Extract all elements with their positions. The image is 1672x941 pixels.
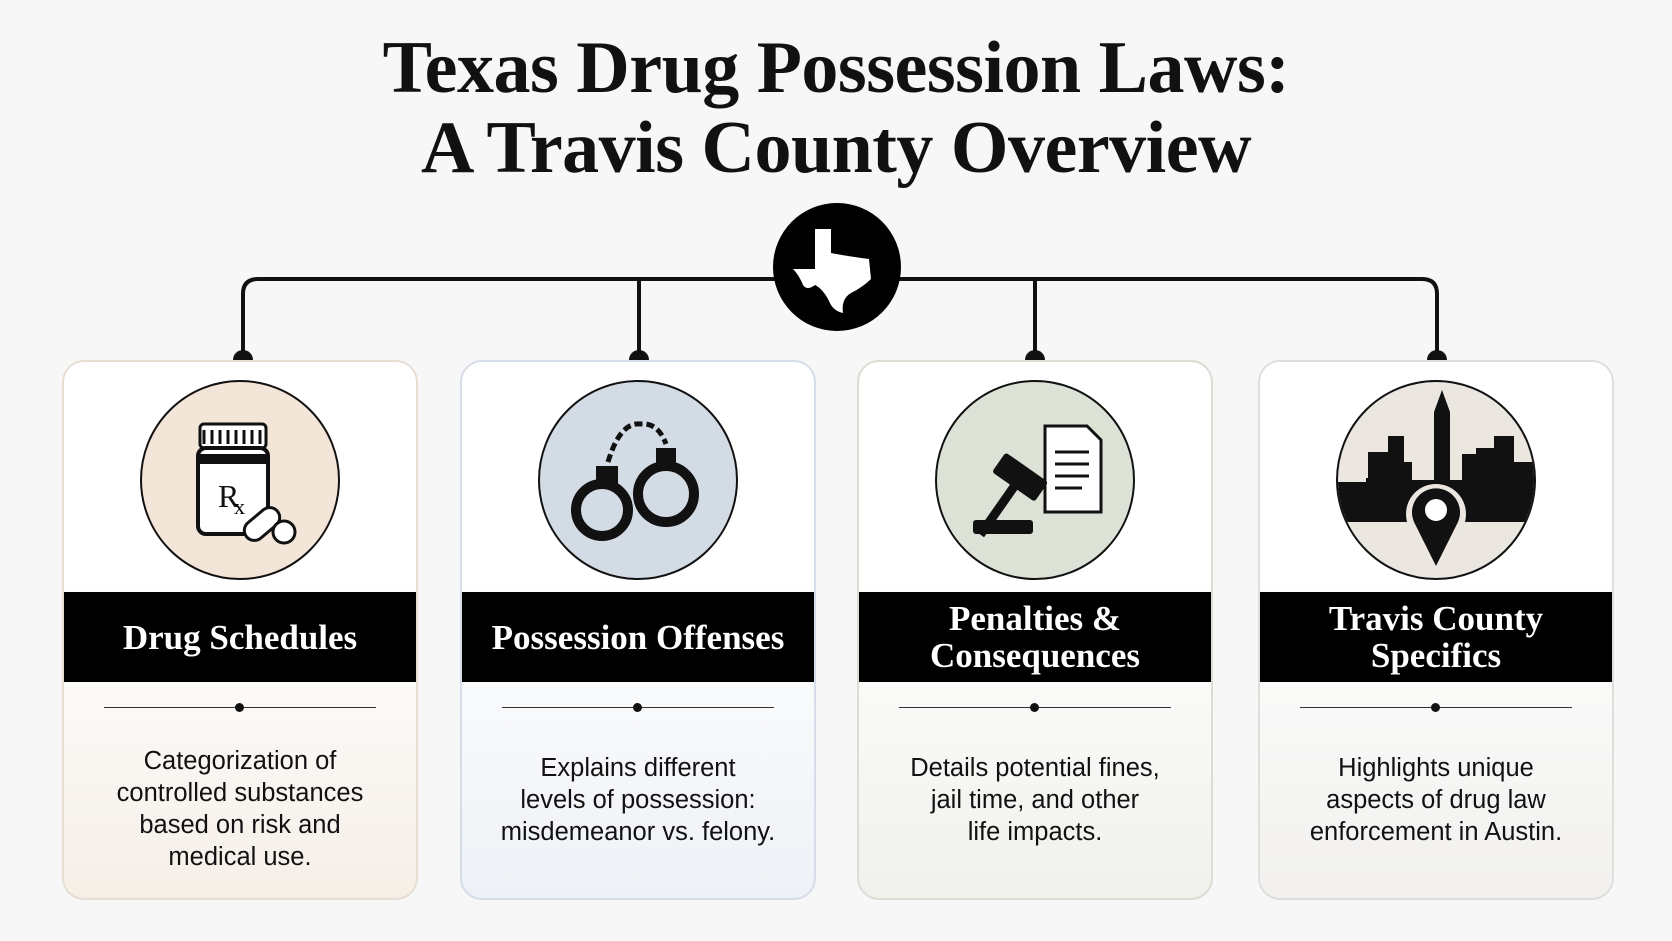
icon: pill bottle: R [218,478,240,514]
heading [859,592,1211,682]
heading: Penalties & [949,599,1121,638]
text [910,754,1160,846]
icon: pill bottle: x [234,494,245,519]
text: levels of possession: [520,786,756,814]
heading: Drug Schedules [123,618,357,656]
text [501,754,775,846]
panel: drug schedules [62,360,418,900]
heading [64,592,416,682]
panel: penalties [857,360,1213,900]
heading: Possession Offenses [492,618,784,656]
text: Details potential fines, [910,754,1160,782]
icon: texas [773,203,901,331]
text: enforcement in Austin. [1310,818,1562,846]
text: jail time, and other [931,786,1139,814]
panel: travis county [1258,360,1614,900]
text: Categorization of [144,747,336,775]
icon: gavel [935,380,1135,580]
text: controlled substances [117,779,363,807]
text: Explains different [540,754,736,782]
title [383,27,1289,189]
heading: Specifics [1371,636,1501,675]
icon: pill bottle [140,380,340,580]
text: based on risk and [139,811,341,839]
heading: Consequences [930,636,1140,675]
text: Highlights unique [1338,754,1534,782]
title: Texas Drug Possession Laws: [383,27,1289,109]
text [117,747,363,871]
title: A Travis County Overview [421,107,1251,189]
text: life impacts. [968,818,1102,846]
heading [1260,592,1612,682]
text: misdemeanor vs. felony. [501,818,775,846]
panel: possession offenses [460,360,816,900]
heading [462,592,814,682]
text: aspects of drug law [1326,786,1546,814]
text: medical use. [168,843,312,871]
heading: Travis County [1329,599,1543,638]
icon: handcuffs [538,380,738,580]
icon: skyline pin [1336,380,1536,580]
text [1310,754,1562,846]
